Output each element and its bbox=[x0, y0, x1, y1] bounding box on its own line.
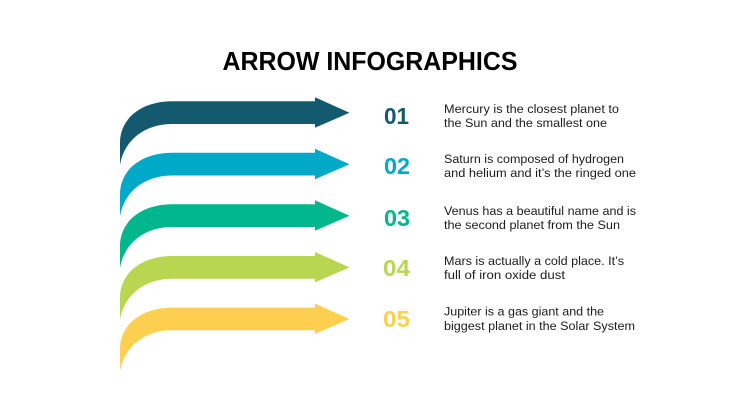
text block 1 bbox=[444, 102, 619, 130]
text block 1: the Sun and the smallest one bbox=[444, 116, 607, 130]
text block 2: Saturn is composed of hydrogen bbox=[444, 152, 624, 166]
text block 1: Mercury is the closest planet to bbox=[444, 102, 619, 116]
arrow 4 bbox=[120, 252, 350, 320]
text block 2 bbox=[444, 152, 636, 180]
text block 3: the second planet from the Sun bbox=[444, 218, 620, 232]
text block 4: full of iron oxide dust bbox=[444, 268, 566, 282]
number 02: 02 bbox=[384, 153, 410, 179]
number 03: 03 bbox=[384, 205, 410, 231]
text block 5: biggest planet in the Solar System bbox=[444, 319, 635, 333]
text block 3: Venus has a beautiful name and is bbox=[444, 204, 636, 218]
text block 5 bbox=[444, 304, 635, 333]
number 01: 01 bbox=[384, 103, 409, 129]
text block 4 bbox=[444, 254, 624, 282]
title: ARROW INFOGRAPHICS bbox=[222, 46, 518, 76]
text block 4: Mars is actually a cold place. It’s bbox=[444, 254, 624, 268]
number 04: 04 bbox=[383, 255, 410, 281]
arrow 1 bbox=[120, 97, 350, 165]
arrow 5 bbox=[120, 304, 350, 371]
arrow 2 bbox=[120, 149, 350, 216]
text block 3 bbox=[444, 204, 636, 232]
arrow 3 bbox=[120, 200, 350, 268]
text block 2: and helium and it’s the ringed one bbox=[444, 166, 636, 180]
text block 5: Jupiter is a gas giant and the bbox=[444, 304, 604, 318]
number 05: 05 bbox=[383, 306, 410, 332]
